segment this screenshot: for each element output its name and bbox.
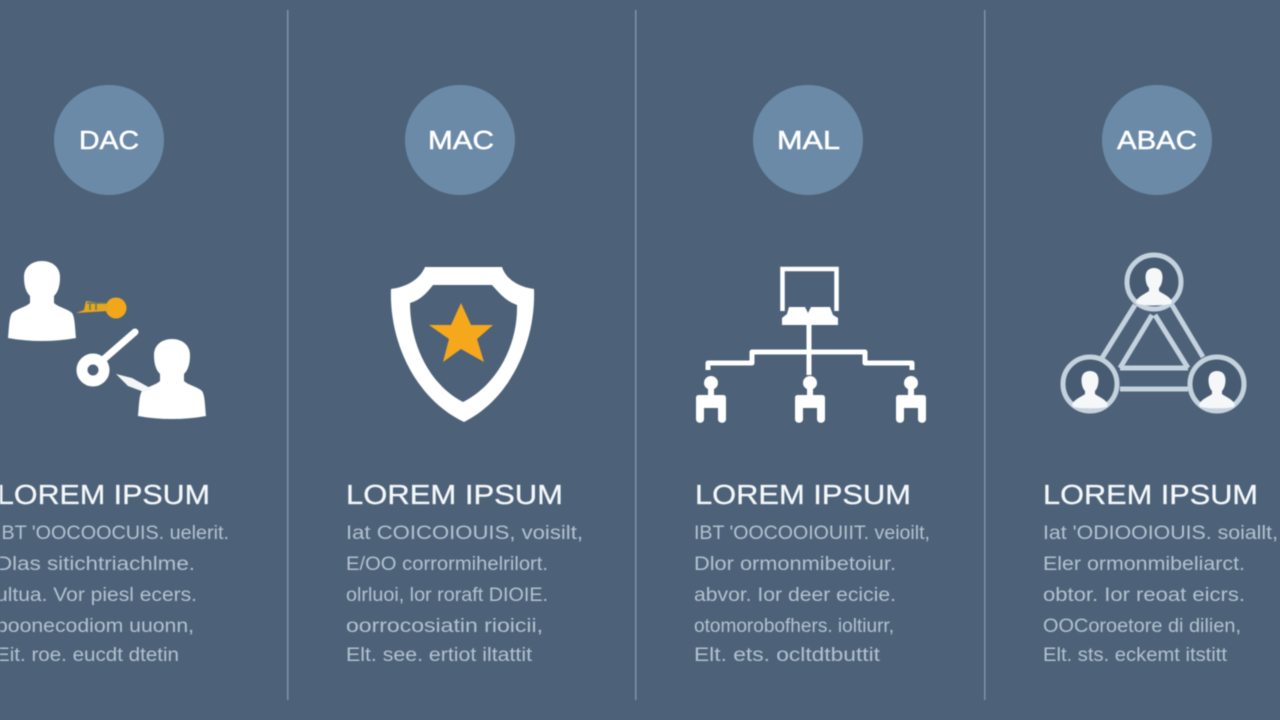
badge: MAL: MAL: [777, 125, 840, 155]
icon: monitor hierarchy: [696, 269, 926, 423]
icon: shield with star: [391, 267, 534, 422]
icon: two users exchanging keys: [8, 261, 206, 419]
body text: IBT 'OOCOOCUIS. uelerit.: [0, 523, 229, 544]
body text: abvor. Ior deer ecicie.: [694, 585, 896, 606]
body text: olrluoi, lor roraft DIOIE.: [346, 585, 548, 606]
body text: IBT 'OOCOOIOUIIT. veioilt,: [694, 523, 930, 544]
body text: Elt. see. ertiot iltattit: [346, 645, 533, 666]
badge: DAC: DAC: [79, 125, 139, 155]
badge: MAC: MAC: [428, 125, 494, 155]
badge: DAC: [54, 85, 164, 195]
heading: LOREM IPSUM: [346, 479, 563, 510]
body text: [1043, 523, 1278, 666]
icon: attribute triangle network: [1063, 255, 1244, 411]
body text: OOCoroetore di dilien,: [1043, 616, 1241, 637]
body text: [0, 523, 229, 666]
badge: MAC: [405, 85, 515, 195]
body text: ultua. Vor piesl ecers.: [0, 585, 197, 606]
badge: MAL: [753, 85, 863, 195]
body text: [346, 523, 583, 666]
body text: Dlor ormonmibetoiur.: [694, 554, 896, 575]
body text: Eit. roe. eucdt dtetin: [0, 645, 179, 666]
body text: obtor. Ior reoat eicrs.: [1043, 585, 1245, 606]
body text: [694, 523, 930, 666]
body text: oorrocosiatin rioicii,: [346, 616, 543, 637]
heading: LOREM IPSUM: [0, 479, 210, 510]
heading: LOREM IPSUM: [695, 479, 911, 510]
body text: E/OO corrormihelrilort.: [346, 554, 548, 575]
panel: MAC: [346, 85, 583, 666]
body text: Iat COICOIOUIS, voisilt,: [346, 523, 583, 544]
body text: Elt. ets. ocltdtbuttit: [694, 645, 881, 666]
panel: DAC: [0, 85, 229, 666]
body text: Elt. sts. eckemt itstitt: [1043, 645, 1228, 666]
body text: otomorobofhers. ioltiurr,: [694, 616, 894, 637]
body text: Eler ormonmibeliarct.: [1043, 554, 1245, 575]
panel: MAL: [694, 85, 930, 666]
panel: ABAC: [1043, 85, 1278, 666]
body text: Dlas sitichtriachlme.: [0, 554, 195, 575]
heading: LOREM IPSUM: [1043, 479, 1258, 510]
body text: poonecodiom uuonn,: [0, 616, 194, 637]
badge: ABAC: ABAC: [1117, 125, 1197, 155]
badge: ABAC: [1102, 85, 1212, 195]
body text: Iat 'ODIOOIOUIS. soiallt,: [1043, 523, 1278, 544]
